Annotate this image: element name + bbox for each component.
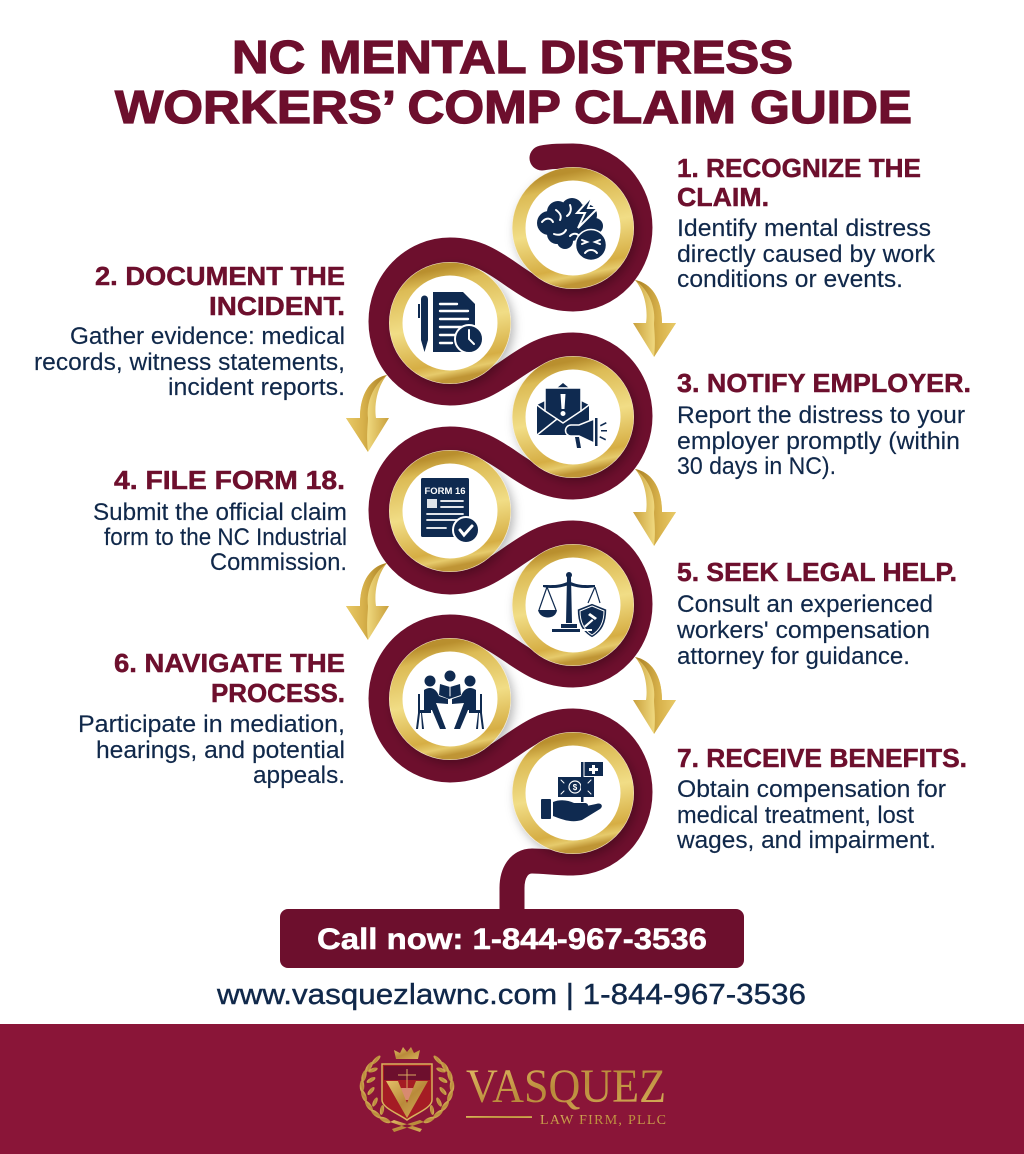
step 7 text: medical treatment, lost [677, 802, 914, 829]
step 1 text: directly caused by work [677, 241, 936, 268]
step 1 medallion: brain icon [512, 167, 634, 289]
step 5 text: attorney for guidance. [677, 643, 910, 670]
step 6 text: PROCESS. [211, 678, 345, 708]
step 1 text: conditions or events. [677, 266, 903, 293]
arrow: step 3 to 5 [633, 469, 676, 546]
call-to-action button: Call now: 1-844-967-3536 [317, 923, 707, 956]
step 4 text: form to the NC Industrial [104, 524, 347, 551]
logo: Vasquez Law Firm [360, 1047, 666, 1132]
step 1 text: CLAIM. [677, 182, 769, 212]
step 4 text [93, 465, 347, 576]
website and phone line: www.vasquezlawnc.com | 1-844-967-3536 [216, 979, 806, 1011]
step 3 text: 3. NOTIFY EMPLOYER. [677, 368, 971, 398]
step 7 text: 7. RECEIVE BENEFITS. [677, 743, 967, 773]
step 7 text: Obtain compensation for [677, 776, 946, 803]
step 6 text: appeals. [253, 762, 345, 789]
step 1 text: Identify mental distress [677, 215, 931, 242]
step 5 text: Consult an experienced [677, 591, 933, 618]
step 2 text: records, witness statements, [34, 349, 345, 376]
step 6 text: hearings, and potential [96, 737, 345, 764]
step 6 text [78, 648, 345, 789]
arrow: step 2 to 4 [346, 375, 389, 452]
arrow: step 4 to 6 [346, 563, 389, 640]
step 2 text: incident reports. [168, 374, 345, 401]
logo: Vasquez Law Firm: LAW FIRM, PLLC [540, 1113, 666, 1128]
logo emblem [360, 1047, 454, 1132]
arrow: step 1 to 3 [633, 280, 676, 357]
step 5 text: 5. SEEK LEGAL HELP. [677, 557, 957, 587]
title: WORKERS’ COMP CLAIM GUIDE [115, 81, 912, 133]
step 4 text: Submit the official claim [93, 499, 347, 526]
step 3 text: employer promptly (within [677, 428, 960, 455]
title [115, 31, 912, 133]
footer band [0, 1024, 1024, 1154]
step 1 text [677, 153, 936, 293]
title: NC MENTAL DISTRESS [232, 31, 793, 83]
step 4 text: Commission. [210, 549, 347, 576]
step 2 text: 2. DOCUMENT THE [95, 261, 345, 291]
step 5 text [676, 557, 957, 670]
step 6 medallion: meeting people icon [389, 638, 511, 760]
step 5 text: workers' compensation [676, 617, 930, 644]
step 4 text: 4. FILE FORM 18. [114, 465, 345, 495]
arrow: step 5 to 7 [633, 657, 676, 734]
step 3 text: 30 days in NC). [677, 453, 836, 480]
step 6 text: 6. NAVIGATE THE [114, 648, 345, 678]
step 4 medallion: Form 18 icon: FORM 16 [424, 486, 466, 496]
step 6 text: Participate in mediation, [78, 711, 345, 738]
step 3 medallion: envelope and megaphone icon [512, 356, 634, 478]
step 2 medallion: document and clock icon [389, 262, 511, 384]
step 2 text: INCIDENT. [209, 291, 345, 321]
winding ribbon path [381, 156, 640, 915]
logo: Vasquez Law Firm: VASQUEZ [466, 1060, 666, 1113]
step 2 text [34, 261, 345, 401]
step 2 text: Gather evidence: medical [70, 323, 345, 350]
step 3 text [677, 368, 971, 480]
step 7 text: wages, and impairment. [676, 827, 936, 854]
call-to-action button [280, 909, 744, 968]
step 7 text [676, 743, 967, 854]
step 7 medallion: money and hand icon: $ [573, 783, 578, 792]
step 1 text: 1. RECOGNIZE THE [677, 153, 921, 183]
step 7 medallion: money and hand icon [512, 732, 634, 854]
step 4 medallion: Form 18 icon [389, 450, 511, 572]
step 5 medallion: scales and shield icon [512, 544, 634, 666]
step 3 text: Report the distress to your [677, 402, 965, 429]
